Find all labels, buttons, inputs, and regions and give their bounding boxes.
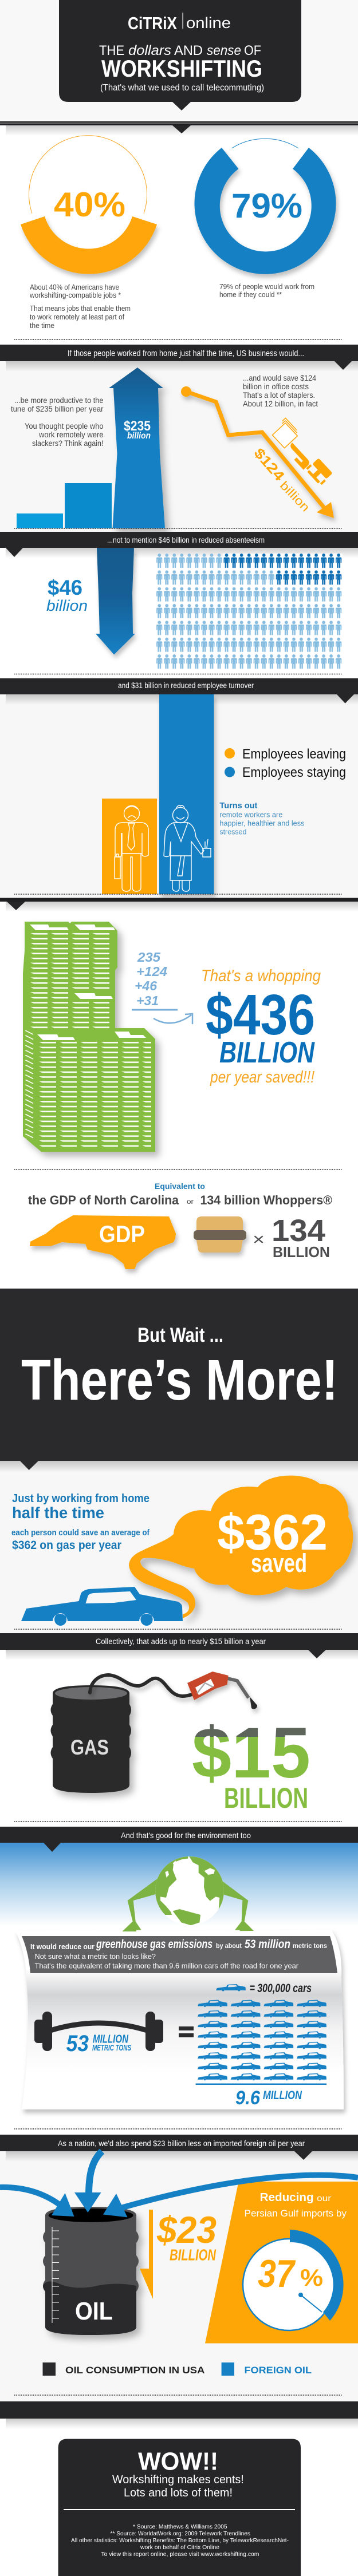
label: GAS: GAS	[70, 1736, 109, 1759]
label: 53 million metric tons: METRIC TONS	[92, 2044, 131, 2053]
banner: environment: And that's good for the environment too	[121, 1831, 251, 1840]
icon: gas pump nozzle and hose	[90, 1672, 257, 1709]
gauge: 37%: 37	[258, 2252, 296, 2296]
text: more productive: work remotely were	[38, 430, 103, 439]
panel: wow conclusion and sources: Workshifting makes cents!	[112, 2474, 244, 2486]
banner: if those people: If those people worked from home just half the time, US business would...	[68, 349, 304, 358]
heading: equivalent to: 134 billion Whoppers®	[200, 1193, 332, 1207]
label: $46 billion: $46	[48, 576, 82, 599]
label: $23 billion: $23	[156, 2208, 217, 2251]
number: 40%: 40%	[54, 185, 125, 224]
label: 9.6 million	[235, 2087, 302, 2109]
banner: foreign oil	[0, 2135, 358, 2162]
icon: blue car	[21, 1587, 183, 1626]
total: $436 billion	[201, 967, 321, 1086]
text: gas savings	[11, 1492, 150, 1552]
banner: greenhouse text: 53 million	[245, 1938, 290, 1951]
logo: citrix online	[128, 13, 231, 33]
gauge: 37%: %	[300, 2264, 323, 2291]
legend: oil: OIL CONSUMPTION IN USA	[65, 2365, 205, 2376]
label: 134 billion: BILLION	[273, 1243, 330, 1261]
ruler	[52, 2227, 59, 2323]
panel: wow conclusion and sources: WOW!!	[138, 2448, 218, 2475]
text: 40% explanation: That means jobs that enable them	[30, 304, 131, 313]
chart: employee turnover	[102, 694, 214, 894]
title line: THE	[99, 43, 124, 58]
sources	[71, 2523, 289, 2558]
text: office costs: That's a lot of staplers.	[243, 391, 315, 400]
text: office costs	[243, 374, 318, 408]
legend: employees: Employees staying	[242, 765, 346, 780]
big up arrow	[109, 368, 165, 528]
text: office costs: ...and would save $124	[243, 374, 316, 382]
arrow: absenteeism down	[96, 548, 135, 655]
banner: greenhouse text: That's the equivalent of taking more than 9.6 million cars off the road for one year	[34, 1961, 299, 1970]
equals sign	[179, 2026, 194, 2037]
heading: equivalent to	[28, 1182, 332, 1207]
icon: North Carolina GDP: GDP	[99, 1220, 145, 1247]
title line: dollars	[128, 43, 171, 58]
legend: employees: Employees leaving	[242, 746, 346, 762]
panel: but wait there's more: But Wait ...	[137, 1324, 223, 1346]
label: $124 billion	[250, 445, 312, 515]
text: more productive: tune of $235 billion per year	[11, 405, 104, 413]
divider bar with tail	[0, 121, 358, 136]
chart: stack of money	[23, 922, 155, 1152]
title line: OF	[244, 43, 261, 58]
panel: wow conclusion and sources	[58, 2439, 301, 2576]
text: 40% explanation: About 40% of Americans have	[30, 283, 119, 291]
closing bar	[0, 2401, 358, 2429]
arrow: curved to total	[154, 1014, 192, 1024]
oil level	[43, 2282, 136, 2335]
banner: absenteeism: ...not to mention $46 billion in reduced absenteeism	[107, 535, 265, 544]
heading: equivalent to: the GDP of North Carolina	[28, 1193, 179, 1207]
icon: paper stack	[270, 418, 300, 448]
panel: but wait there's more	[0, 1289, 358, 1472]
continents	[155, 1856, 224, 1925]
sources: work on behalf of Citrix Online	[140, 2544, 219, 2551]
text: reducing imports	[244, 2191, 347, 2219]
text: turns out: stressed	[219, 828, 246, 836]
icon: desk chair	[305, 457, 333, 486]
bar small	[17, 513, 63, 528]
text: reducing imports: our	[317, 2194, 331, 2203]
label: 53 million metric tons: 53	[66, 2031, 89, 2056]
banner: collectively: Collectively, that adds up to nearly $15 billion a year	[96, 1637, 266, 1646]
text: more productive: You thought people who	[25, 422, 103, 430]
banner: greenhouse text: greenhouse gas emissions	[96, 1938, 213, 1951]
text: reducing imports: Persian Gulf imports by	[244, 2208, 347, 2219]
label: $124 billion: billion	[277, 479, 312, 515]
text: gas savings: $362 on gas per year	[12, 1539, 121, 1552]
panel: persian gulf	[205, 2182, 358, 2344]
banner: turnover: and $31 billion in reduced employee turnover	[118, 681, 254, 690]
icon: whopper burger	[194, 1216, 246, 1253]
banner: greenhouse text: Not sure what a metric ton looks like?	[34, 1952, 156, 1961]
text: 79% explanation	[219, 282, 314, 299]
top bills	[30, 924, 146, 1040]
icon: green globe holding the card	[123, 1856, 254, 1931]
figure: happy robe man	[164, 805, 211, 891]
gauge: 37%	[243, 2230, 344, 2330]
text: 40% explanation: workshifting-compatible jobs *	[29, 291, 121, 299]
label: $23 billion	[140, 2208, 217, 2299]
bar medium	[65, 483, 112, 528]
text: office costs: billion in office costs	[243, 382, 309, 391]
text: gas savings: half the time	[12, 1504, 104, 1522]
chart: falling office cost line	[181, 386, 334, 518]
arms	[123, 1879, 254, 1939]
number: 79%: 79%	[231, 187, 302, 225]
heading: equivalent to: or	[187, 1198, 194, 1206]
total line	[196, 2084, 326, 2085]
banner: greenhouse text	[22, 1936, 337, 1973]
sum: 235 + 124 + 46 + 31: 235	[137, 950, 161, 965]
label: $124 billion: $124	[250, 445, 288, 484]
total: $436 billion: $436	[206, 983, 315, 1047]
text: office costs: About 12 billion, in fact	[243, 400, 318, 408]
banner: greenhouse text: metric tons	[293, 1942, 327, 1950]
text: gas savings: Just by working from home	[12, 1492, 150, 1505]
figure: unhappy suit man	[115, 806, 148, 891]
legend: oil: FOREIGN OIL	[244, 2365, 312, 2376]
text: 40% explanation: to work remotely at least part of	[30, 313, 124, 321]
label: 134 billion: 134	[272, 1214, 325, 1248]
panel: wow conclusion and sources: Lots and lots of them!	[124, 2487, 233, 2499]
banner: greenhouse text: by about	[216, 1942, 242, 1950]
bar: employees staying	[159, 694, 214, 894]
banner: if those people	[0, 345, 358, 372]
label: 134 billion: ×	[253, 1230, 265, 1249]
text: 40% explanation: the time	[30, 321, 54, 330]
logo: citrix online: online	[186, 14, 231, 31]
banner: turnover	[0, 678, 358, 705]
total: $15 billion: $15	[192, 1713, 310, 1793]
total: $436 billion: BILLION	[219, 1036, 315, 1069]
label: 9.6 million: 9.6	[235, 2087, 261, 2109]
text: more productive	[11, 396, 104, 448]
panel: greenhouse gas card	[15, 1930, 344, 2109]
label: $46 billion: billion	[46, 597, 88, 614]
text: turns out: Turns out	[219, 801, 257, 811]
chart: productivity bars	[17, 368, 165, 528]
text: turns out: happier, healthier and less	[219, 819, 305, 828]
sources: All other statistics: Workshifting Benefits: The Bottom Line, by TeleworkResearchNet-	[71, 2537, 289, 2544]
total: $436 billion: per year saved!!!	[210, 1068, 314, 1086]
sources: * Source: Matthews & Williams 2005	[133, 2523, 227, 2530]
banner: environment	[0, 1827, 358, 1852]
title line	[99, 43, 261, 58]
sources: ** Source: WorldatWork.org: 2009 Telework Trendlines	[110, 2530, 250, 2537]
sum: 235 + 124 + 46 + 31: +46	[135, 978, 157, 993]
banner: foreign oil: As a nation, we'd also spend $23 billion less on imported foreign oil per year	[58, 2139, 305, 2148]
text: 79% explanation: home if they could **	[219, 290, 282, 299]
sources: To view this report online, please visit www.workshifting.com	[101, 2551, 259, 2558]
text: more productive: slackers? Think again!	[32, 439, 103, 448]
label: 53 million metric tons: MILLION	[93, 2033, 128, 2046]
legend: oil	[42, 2362, 312, 2376]
label: $46 billion	[46, 576, 88, 614]
stat: 79% ring	[195, 139, 336, 274]
legend: employees	[225, 746, 346, 780]
title line: AND	[174, 43, 203, 58]
label: $235 billion: billion	[127, 431, 151, 441]
banner: absenteeism	[0, 532, 358, 558]
icon: oil barrel	[43, 2207, 139, 2335]
bar: employees leaving	[102, 799, 157, 894]
text: gas savings: each person could save an average of	[11, 1528, 150, 1538]
total: $15 billion: BILLION	[224, 1782, 308, 1814]
cloud: exhaust $362 saved	[129, 1476, 353, 1618]
sum: 235 + 124 + 46 + 31	[132, 950, 178, 1011]
stat: 40% ring	[21, 136, 157, 274]
legend: car = 300,000 cars: = 300,000 cars	[250, 1982, 312, 1995]
icon: stapler	[285, 442, 311, 470]
subtitle: (That's what we used to call telecommuting)	[100, 83, 264, 93]
text: turns out: remote workers are	[219, 811, 282, 819]
logo: citrix online: CiTRiX	[128, 13, 177, 33]
label: $362 saved: $362	[217, 1504, 328, 1560]
text: reducing imports: Reducing	[260, 2191, 314, 2204]
label: $235 billion: $235	[124, 418, 151, 434]
label: OIL: OIL	[75, 2297, 113, 2325]
icon: North Carolina GDP	[30, 1215, 176, 1269]
text: 40% explanation	[29, 283, 131, 330]
banner: collectively	[0, 1633, 358, 1660]
icon: barbell	[34, 2012, 163, 2051]
label: $362 saved: saved	[251, 1548, 307, 1578]
label: 134 billion	[253, 1214, 330, 1261]
bill rows	[29, 932, 68, 1030]
banner: greenhouse text: It would reduce our	[30, 1942, 95, 1951]
title: workshifting: WORKSHIFTING	[101, 55, 262, 82]
sum: 235 + 124 + 46 + 31: +31	[136, 993, 159, 1008]
label: $23 billion: BILLION	[170, 2246, 217, 2263]
divider bar with tail	[0, 898, 358, 912]
header: title callout	[59, 0, 301, 110]
text: more productive: ...be more productive to the	[14, 396, 103, 405]
sum: 235 + 124 + 46 + 31: +124	[136, 964, 167, 979]
label: $235 billion	[124, 418, 151, 441]
icon: gas barrel	[50, 1685, 131, 1793]
chart: people grid	[156, 554, 343, 671]
text: 79% explanation: 79% of people would work from	[219, 282, 314, 291]
label: 9.6 million: MILLION	[263, 2089, 302, 2102]
legend: car = 300,000 cars	[216, 1982, 312, 1995]
total: $436 billion: That's a whopping	[201, 967, 321, 985]
arrows: foreign oil flowing in	[0, 2151, 358, 2217]
heading: equivalent to: Equivalent to	[155, 1182, 205, 1191]
text: turns out	[219, 801, 305, 836]
label: 53 million metric tons	[66, 2031, 131, 2056]
title line: sense	[207, 43, 241, 58]
chart: grid of cars	[198, 2000, 330, 2084]
